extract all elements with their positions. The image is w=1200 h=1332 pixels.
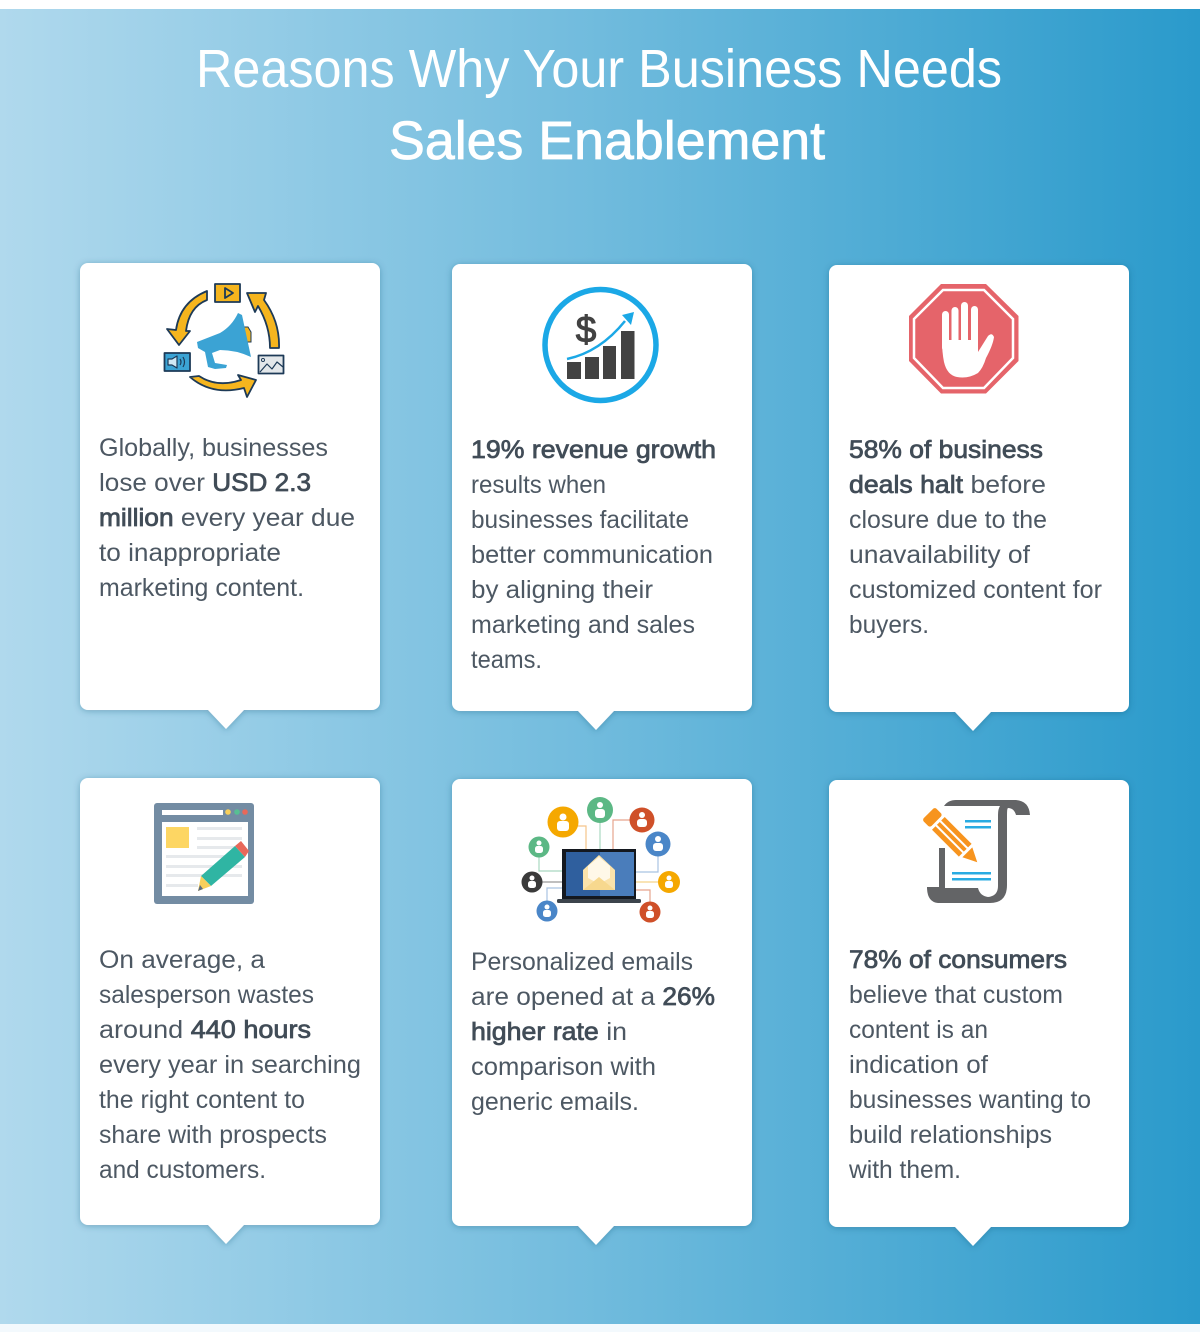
- card 4 text: salesperson wastes: [99, 981, 314, 1009]
- card 6 text: believe that custom: [849, 981, 1063, 1009]
- card 6 text: 78% of consumers: [849, 946, 1067, 974]
- card 4 text: [99, 946, 361, 1184]
- card 1 background: [80, 263, 380, 729]
- card 4 text: On average, a: [99, 946, 265, 974]
- card 2 background: [452, 264, 752, 730]
- card 2 text: results when: [471, 471, 606, 499]
- card 5 text: comparison with: [471, 1053, 656, 1081]
- card 5 text: [471, 948, 715, 1116]
- card 3 text: unavailability of: [849, 541, 1030, 569]
- icon: document window with pencil: [154, 803, 254, 904]
- card 3 background: [829, 265, 1129, 731]
- card 2 text: by aligning their: [471, 576, 653, 604]
- card 4 text: the right content to: [99, 1086, 305, 1114]
- icon: rising revenue chart: $: [576, 309, 596, 350]
- icon: scroll with pencil: [922, 800, 1030, 903]
- card 2 text: better communication: [471, 541, 713, 569]
- panel: card 1 lost revenue: [80, 263, 380, 729]
- card 6 text: [848, 946, 1091, 1184]
- icon: rising revenue chart: [545, 290, 656, 400]
- title: Reasons Why Your Business Needs: [196, 39, 1002, 99]
- card 3 text: deals halt before: [849, 471, 1046, 499]
- card 2 text: marketing and sales: [471, 611, 695, 639]
- card 6 text: content is an: [849, 1016, 988, 1044]
- card 4 text: and customers.: [99, 1156, 266, 1184]
- card 2 text: teams.: [471, 646, 542, 674]
- icon: megaphone with cycle arrows: [164, 284, 284, 397]
- card 3 text: customized content for: [849, 576, 1102, 604]
- card 1 text: marketing content.: [99, 574, 304, 602]
- card 5 background: [452, 779, 752, 1245]
- card 6 text: build relationships: [849, 1121, 1052, 1149]
- icon: laptop email network: [522, 797, 680, 922]
- card 2 text: businesses facilitate: [471, 506, 689, 534]
- panel: card 4 wasted hours: [80, 778, 380, 1244]
- panel: card 3 stalled deals: [829, 265, 1129, 731]
- panel: card 5 personalized emails: [452, 779, 752, 1245]
- card 6 text: indication of: [849, 1051, 988, 1079]
- card 5 text: generic emails.: [471, 1088, 639, 1116]
- card 3 text: 58% of business: [849, 436, 1043, 464]
- card 4 text: share with prospects: [99, 1121, 327, 1149]
- card 3 text: closure due to the: [849, 506, 1047, 534]
- card 1 text: [99, 434, 355, 602]
- card 1 text: lose over USD 2.3: [99, 469, 311, 497]
- card 4 background: [80, 778, 380, 1244]
- card 1 text: million every year due: [99, 504, 355, 532]
- card 5 text: Personalized emails: [471, 948, 693, 976]
- card 6 text: businesses wanting to: [849, 1086, 1091, 1114]
- title: [196, 39, 1002, 171]
- card 5 text: higher rate in: [471, 1018, 627, 1046]
- icon: stop hand sign: [909, 284, 1018, 394]
- card 1 text: to inappropriate: [99, 539, 281, 567]
- card 4 text: every year in searching: [99, 1051, 361, 1079]
- card 6 text: with them.: [848, 1156, 961, 1184]
- card 3 text: buyers.: [849, 611, 929, 639]
- panel: card 2 revenue growth: [452, 264, 752, 730]
- card 5 text: are opened at a 26%: [471, 983, 715, 1011]
- card 2 text: 19% revenue growth: [471, 436, 716, 464]
- card 1 text: Globally, businesses: [99, 434, 328, 462]
- panel: card 6 custom content: [829, 780, 1129, 1246]
- title: Sales Enablement: [389, 111, 825, 171]
- card 3 text: [849, 436, 1102, 639]
- card 6 background: [829, 780, 1129, 1246]
- card 4 text: around 440 hours: [99, 1016, 311, 1044]
- card 2 text: [471, 436, 716, 674]
